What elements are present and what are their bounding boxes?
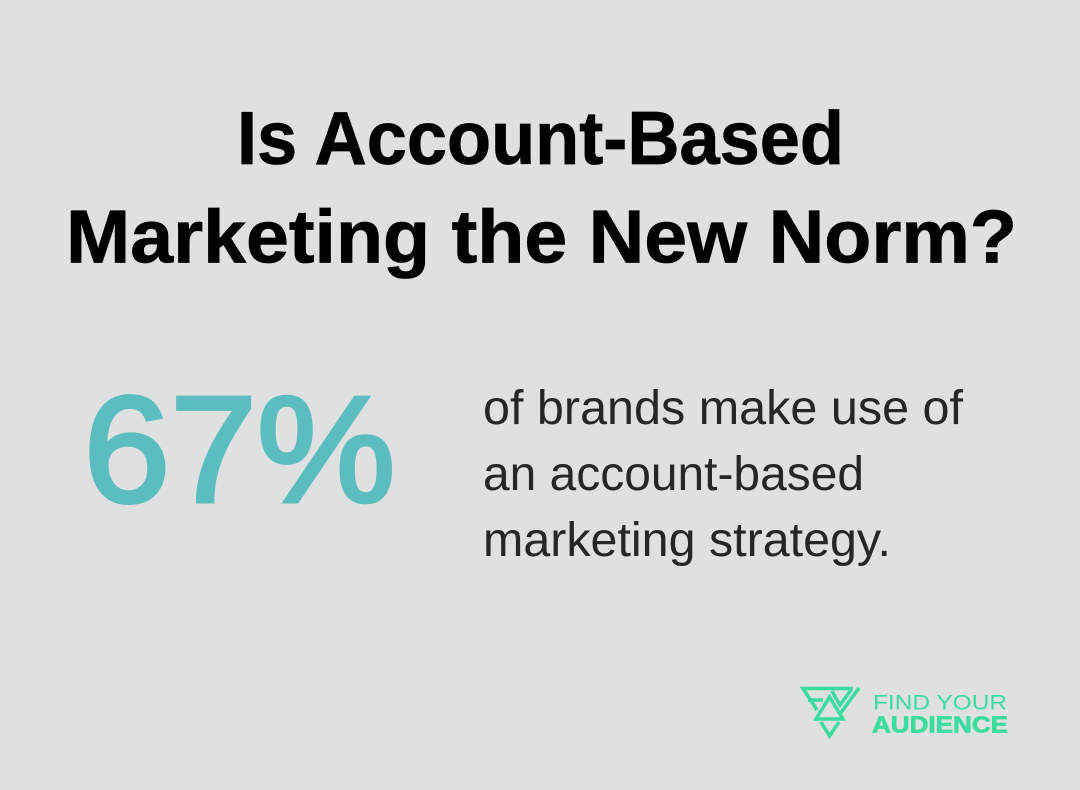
title: [66, 96, 1017, 278]
icon: triangle mark: [803, 688, 859, 736]
wordmark: [872, 692, 1008, 738]
statistic: 67%: 67%: [84, 364, 396, 534]
title: Is Account-Based: [237, 96, 844, 180]
statistic description: an account-based: [483, 448, 864, 501]
statistic description: marketing strategy.: [483, 514, 891, 567]
statistic description: of brands make use of: [483, 382, 964, 435]
statistic description: [483, 382, 964, 567]
title: Marketing the New Norm?: [66, 194, 1017, 278]
wordmark: FIND YOUR: [873, 692, 1007, 714]
logo: Find Your Audience: [803, 688, 1008, 738]
wordmark: AUDIENCE: [872, 712, 1008, 738]
